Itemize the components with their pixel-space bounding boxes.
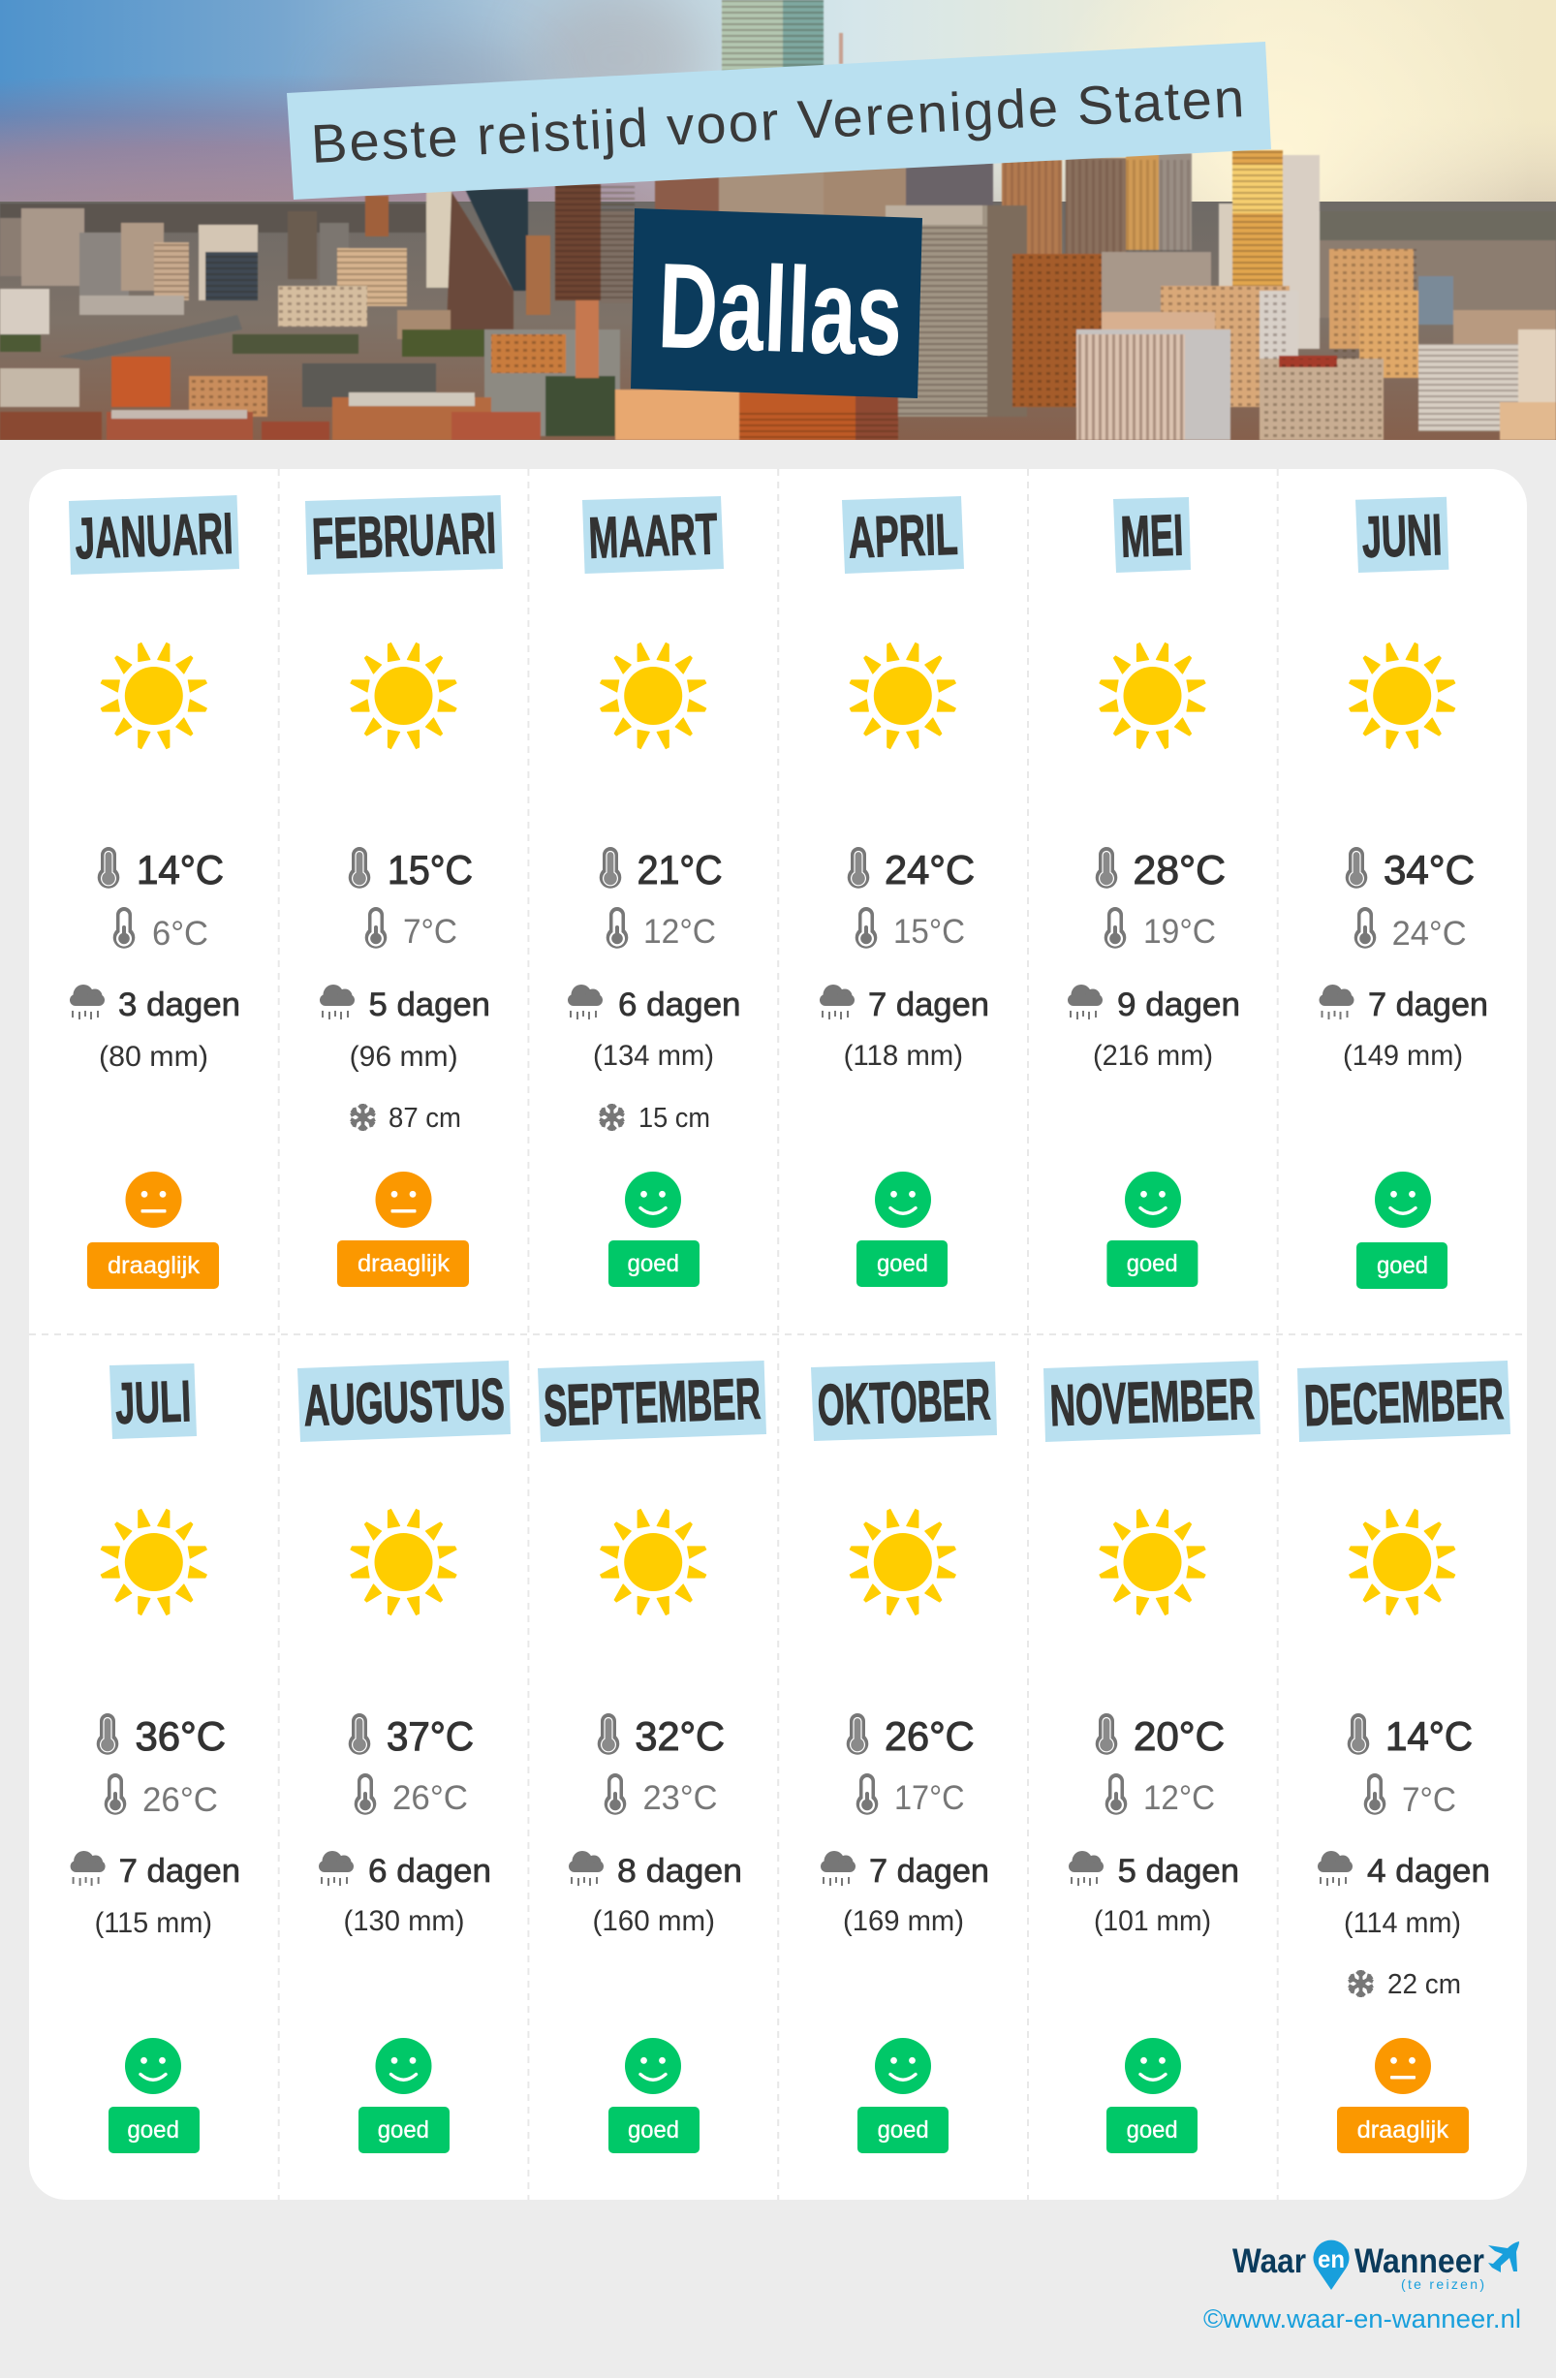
rating badge: goed [1127, 2116, 1178, 2144]
maximum temperature [349, 1713, 474, 1759]
icon: happy face [376, 2038, 432, 2094]
icon: sun [351, 1510, 456, 1614]
month label: NOVEMBER [1048, 1366, 1256, 1438]
month label [1043, 1361, 1260, 1442]
icon: map pin: en [1318, 2246, 1345, 2273]
month label: OKTOBER [817, 1366, 991, 1438]
rain days: 7 dagen [868, 986, 989, 1023]
maximum temperature [1348, 1713, 1473, 1759]
rain days: 7 dagen [119, 1853, 240, 1890]
icon: happy face [625, 2038, 681, 2094]
icon: sun [1100, 1510, 1205, 1614]
rainfall: (80 mm) [99, 1041, 208, 1073]
month label [1355, 497, 1448, 573]
rain days [1320, 985, 1488, 1023]
minimum temperature [856, 907, 965, 951]
rating badge: goed [878, 2116, 929, 2144]
rainfall: (160 mm) [593, 1905, 715, 1937]
rain days [1069, 1851, 1239, 1890]
snowfall: 15 cm [638, 1103, 710, 1134]
maximum temperature: 34°C [1384, 847, 1475, 892]
maximum temperature: 28°C [1134, 847, 1226, 892]
rating badge [856, 1240, 948, 1287]
rain days: 5 dagen [1118, 1853, 1239, 1890]
rating badge [857, 2107, 949, 2153]
maximum temperature [98, 847, 224, 892]
month label [1113, 497, 1191, 573]
logo: Waar en Wanneer: (te reizen) [1401, 2276, 1484, 2292]
city name banner [631, 208, 922, 398]
rain days: 9 dagen [1117, 986, 1240, 1023]
minimum temperature: 26°C [392, 1779, 468, 1817]
rain days: 5 dagen [368, 986, 490, 1023]
rainfall: (134 mm) [593, 1040, 714, 1072]
maximum temperature: 26°C [885, 1713, 975, 1759]
rating badge [1106, 2107, 1198, 2153]
maximum temperature: 36°C [136, 1713, 226, 1759]
column: november [1043, 1361, 1260, 2153]
logo: Waar en Wanneer [1232, 2240, 1519, 2292]
rating badge [1337, 2107, 1469, 2153]
maximum temperature: 14°C [137, 847, 224, 892]
month label: JUNI [1361, 502, 1443, 570]
rain days [820, 985, 989, 1023]
month label [69, 495, 239, 575]
minimum temperature: 19°C [1143, 913, 1216, 951]
snowfall [600, 1103, 710, 1134]
maximum temperature: 32°C [635, 1713, 725, 1759]
maximum temperature [349, 847, 473, 892]
icon: sun [101, 1510, 206, 1614]
rainfall: (130 mm) [343, 1905, 465, 1937]
minimum temperature [1105, 907, 1216, 951]
minimum temperature [113, 907, 208, 953]
icon: happy face [625, 1172, 681, 1228]
rating badge: draaglijk [358, 1250, 451, 1277]
rain days [1068, 985, 1240, 1023]
right of Dallas [886, 205, 1027, 417]
maximum temperature [847, 1713, 975, 1759]
minimum temperature: 12°C [1143, 1779, 1215, 1817]
title banner: Beste reistijd voor Verenigde Staten [309, 67, 1245, 174]
minimum temperature [607, 907, 716, 951]
rating badge: goed [127, 2116, 179, 2144]
minimum temperature: 6°C [152, 915, 208, 953]
snowfall: 87 cm [389, 1103, 461, 1134]
rating badge: goed [1127, 1250, 1178, 1277]
rainfall: (118 mm) [844, 1040, 963, 1072]
maximum temperature: 15°C [388, 847, 473, 892]
maximum temperature [598, 1713, 725, 1759]
minimum temperature: 17°C [894, 1779, 965, 1817]
rainfall: (216 mm) [1093, 1040, 1213, 1072]
rainfall: (115 mm) [95, 1907, 212, 1939]
icon: sun [351, 643, 456, 748]
icon: sun [1350, 1510, 1455, 1614]
column: oktober [811, 1362, 997, 2153]
rating badge [337, 1240, 469, 1287]
month label [811, 1362, 997, 1441]
icon: happy face [875, 2038, 931, 2094]
month label [582, 496, 724, 574]
logo: Waar en Wanneer: Wanneer [1354, 2242, 1484, 2280]
city name banner: Dallas [656, 238, 905, 382]
rain days [71, 1851, 240, 1890]
minimum temperature: 23°C [643, 1779, 717, 1817]
rating badge: draaglijk [108, 1252, 201, 1279]
rating badge [1106, 1240, 1198, 1287]
snowfall: 22 cm [1387, 1969, 1461, 2000]
panel: climate table [29, 469, 1527, 2200]
maximum temperature [97, 1713, 226, 1759]
month label: MAART [587, 501, 719, 571]
logo: Waar en Wanneer: Waar [1232, 2242, 1306, 2280]
rainfall: (169 mm) [843, 1905, 964, 1937]
month label [109, 1363, 197, 1439]
maximum temperature: 21°C [638, 847, 723, 892]
rain days: 4 dagen [1367, 1853, 1490, 1890]
rating badge: goed [628, 1250, 679, 1277]
icon: sun [1100, 643, 1205, 748]
rating badge [358, 2107, 450, 2153]
rating badge [608, 1240, 700, 1287]
maximum temperature: 14°C [1385, 1713, 1473, 1759]
foreground [615, 390, 739, 440]
rainfall: (114 mm) [1344, 1907, 1461, 1939]
maximum temperature [1096, 847, 1226, 892]
month label [842, 496, 964, 574]
rainfall: (149 mm) [1343, 1040, 1463, 1072]
minimum temperature [1105, 1773, 1215, 1817]
rain days: 7 dagen [869, 1853, 989, 1890]
rain days: 6 dagen [368, 1853, 491, 1890]
month label [538, 1361, 766, 1442]
icon: happy face [125, 2038, 181, 2094]
icon: happy face [875, 1172, 931, 1228]
rain days [568, 985, 740, 1023]
rain days [1318, 1851, 1490, 1890]
rain days [821, 1851, 989, 1890]
minimum temperature [605, 1773, 717, 1817]
column: augustus [297, 1361, 511, 2153]
minimum temperature [105, 1773, 218, 1819]
maximum temperature: 20°C [1134, 1713, 1225, 1759]
maximum temperature: 24°C [885, 847, 975, 892]
minimum temperature [355, 1773, 468, 1817]
minimum temperature: 15°C [893, 913, 965, 951]
rain days [70, 985, 240, 1023]
towers behind [722, 0, 824, 73]
icon: neutral face [1375, 2038, 1431, 2094]
header photo: Dallas skyline [0, 0, 1556, 440]
column: maart [568, 496, 740, 1287]
minimum temperature: 7°C [1402, 1781, 1456, 1819]
minimum temperature [856, 1773, 965, 1817]
rain days [569, 1851, 742, 1890]
rating badge [1356, 1242, 1447, 1289]
maximum temperature [600, 847, 723, 892]
month label: MEI [1120, 502, 1184, 570]
minimum temperature: 24°C [1392, 915, 1467, 953]
rating badge: goed [378, 2116, 429, 2144]
icon: sun [850, 1510, 955, 1614]
month label: JANUARI [74, 501, 234, 571]
column: juli [71, 1363, 240, 2153]
rating badge [608, 2107, 700, 2153]
month label: APRIL [847, 502, 959, 570]
rating badge: goed [1377, 1252, 1428, 1279]
rating badge: goed [628, 2116, 679, 2144]
rating badge [109, 2107, 200, 2153]
rain days: 8 dagen [617, 1853, 742, 1890]
maximum temperature: 37°C [387, 1713, 474, 1759]
column: september [538, 1361, 766, 2153]
month label: JULI [114, 1368, 192, 1436]
rating badge: goed [877, 1250, 928, 1277]
icon: sun [601, 1510, 706, 1614]
center towers [426, 191, 451, 288]
icon: neutral face [376, 1172, 432, 1228]
icon: airplane [1488, 2241, 1519, 2272]
rain days: 7 dagen [1368, 986, 1488, 1023]
column: april [820, 496, 989, 1287]
column: januari [69, 495, 240, 1289]
rating badge: draaglijk [1357, 2116, 1449, 2144]
icon: sun [601, 643, 706, 748]
icon: happy face [1125, 2038, 1181, 2094]
far ground right [1318, 211, 1556, 318]
month label [305, 495, 503, 575]
icon: happy face [1125, 1172, 1181, 1228]
website credit: ©www.waar-en-wanneer.nl [1203, 2304, 1521, 2333]
month label: SEPTEMBER [543, 1366, 762, 1438]
snowfall [351, 1103, 461, 1134]
rainfall: (101 mm) [1094, 1905, 1211, 1937]
far ground left [0, 204, 426, 233]
column: mei [1068, 497, 1240, 1287]
column: december [1297, 1361, 1510, 2153]
snowfall [1349, 1969, 1461, 2000]
column: juni [1320, 497, 1488, 1289]
icon: neutral face [126, 1172, 182, 1228]
rating badge [87, 1242, 219, 1289]
month label [297, 1361, 511, 1442]
rain days: 6 dagen [618, 986, 740, 1023]
column: februari [305, 495, 503, 1287]
rainfall: (96 mm) [350, 1041, 458, 1073]
icon: sun [1350, 643, 1455, 748]
title banner [287, 42, 1271, 200]
icon: sun [101, 643, 206, 748]
rain days: 3 dagen [118, 986, 240, 1023]
minimum temperature: 26°C [142, 1781, 218, 1819]
left towers [21, 208, 84, 286]
minimum temperature [365, 907, 457, 951]
icon: sun [850, 643, 955, 748]
minimum temperature [1364, 1773, 1456, 1819]
month label: AUGUSTUS [302, 1366, 506, 1438]
rain days [319, 1851, 491, 1890]
minimum temperature [1354, 907, 1467, 953]
icon: happy face [1375, 1172, 1431, 1228]
minimum temperature: 7°C [403, 913, 457, 951]
rain days [320, 985, 490, 1023]
minimum temperature: 12°C [643, 913, 716, 951]
icon: map pin [1314, 2240, 1350, 2290]
month label: FEBRUARI [311, 500, 497, 572]
